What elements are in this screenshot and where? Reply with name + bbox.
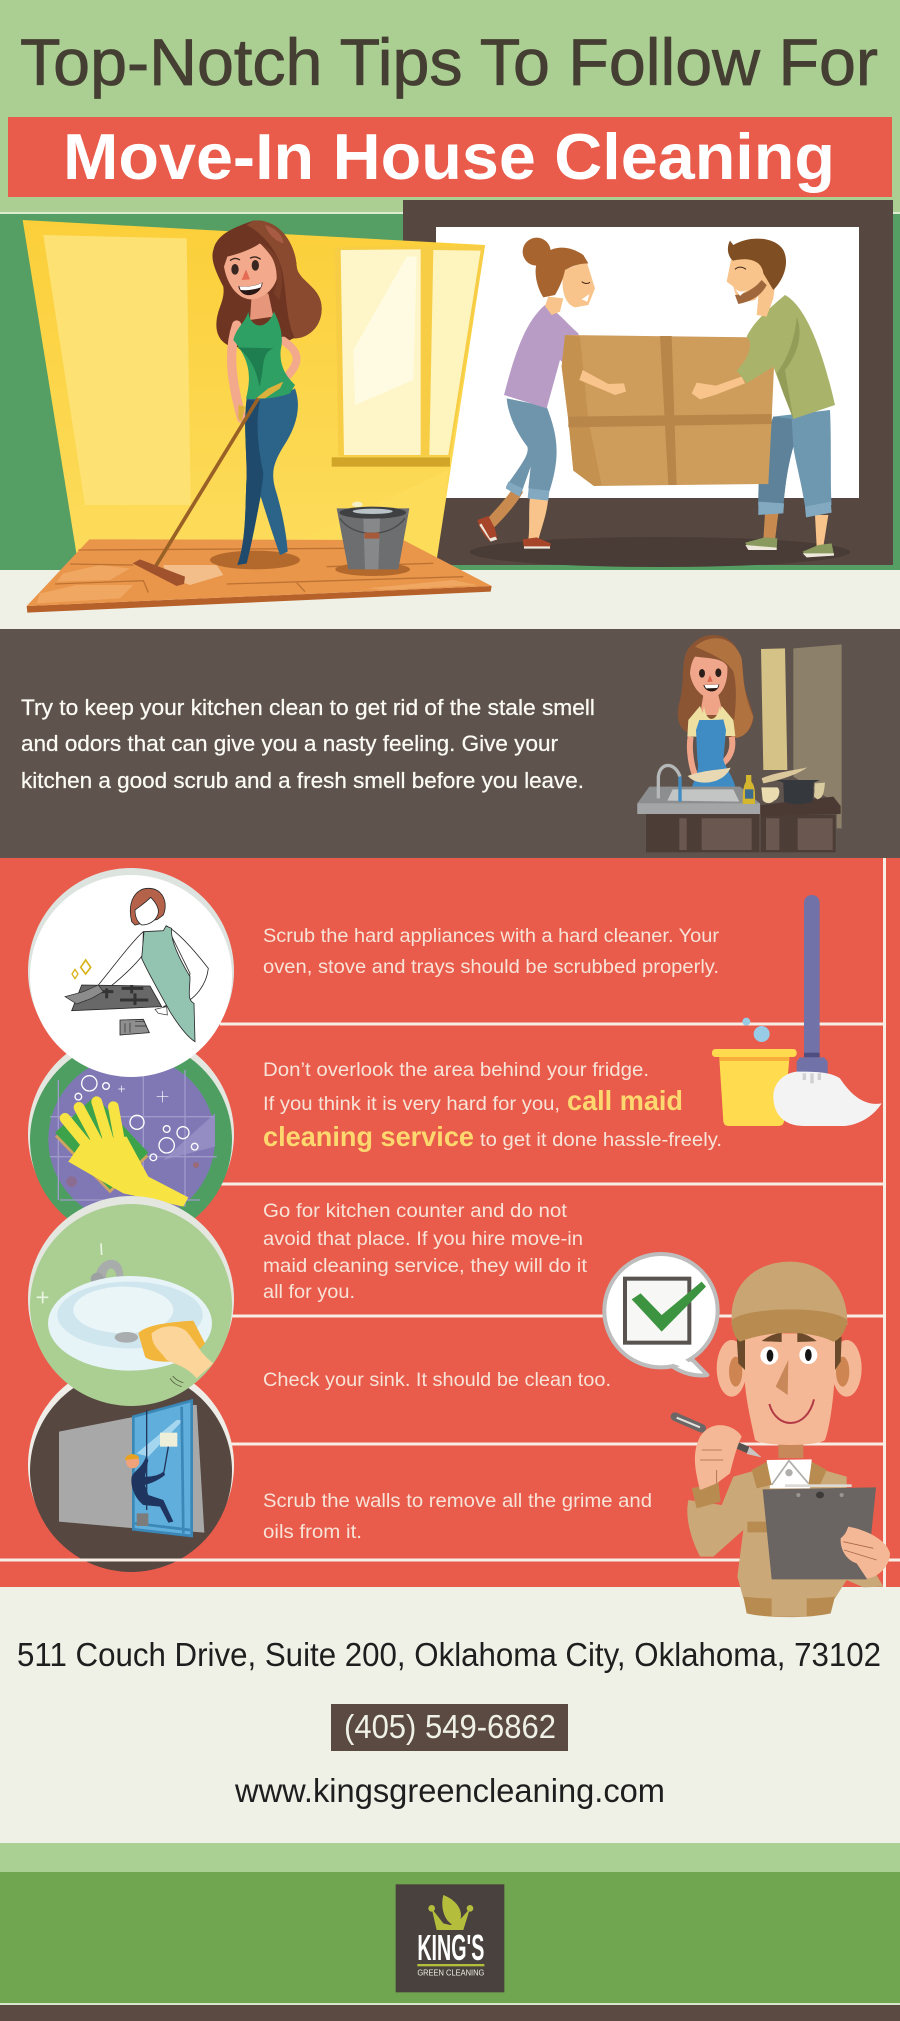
wet floor patch: [163, 565, 223, 585]
panel: moving couple: [403, 200, 893, 567]
tip 2 text: cleaning service: [263, 1121, 474, 1152]
writing hand: [695, 1425, 742, 1490]
pen: [675, 1417, 702, 1428]
tip 3 text: [263, 1201, 588, 1303]
illustration: couple carrying box: [477, 238, 835, 557]
cabinets: [646, 814, 759, 852]
hair back: [212, 220, 322, 347]
icon circle: fourth tip walls: [28, 1362, 234, 1572]
tip 1 text: [263, 926, 720, 978]
logo: King's Green Cleaning: GREEN CLEANING: [417, 1969, 484, 1978]
tip 2 text: to get it done hassle-freely.: [480, 1130, 722, 1151]
logo: King's Green Cleaning: [396, 1884, 504, 1992]
face: [740, 1333, 839, 1445]
panel: tips: [0, 858, 900, 1587]
footer phone: (405) 549-6862: [344, 1708, 556, 1745]
bottle: [743, 775, 755, 804]
man legs: [763, 513, 778, 540]
box: [562, 335, 774, 486]
icon circle: first tip appliances: [28, 868, 234, 1077]
intro text: kitchen a good scrub and a fresh smell before you leave.: [21, 768, 584, 793]
hair: [678, 635, 753, 738]
illustration: woman washing dishes: [637, 635, 842, 852]
man shirt: [737, 295, 835, 419]
doorway: [761, 648, 787, 770]
hair: [130, 888, 165, 925]
arms: [690, 737, 695, 775]
arms: [579, 370, 626, 395]
clipboard: [763, 1487, 876, 1579]
icon circle: third tip sink: [28, 1196, 234, 1406]
shirt collar: [767, 1459, 812, 1488]
icon circle: second tip fridge: [28, 1031, 234, 1241]
neck: [778, 1444, 803, 1458]
footer website: www.kingsgreencleaning.com: [234, 1772, 665, 1809]
window panes: [341, 249, 421, 455]
neck and arms: [250, 293, 273, 320]
woman head: [545, 297, 563, 315]
tip 2 text: Don’t overlook the area behind your fridge.: [263, 1060, 649, 1081]
tip 2 text: [263, 1060, 722, 1152]
ears: [717, 1340, 747, 1397]
crown icon: [428, 1895, 473, 1930]
stove: [72, 985, 162, 1011]
tip 3 text: maid cleaning service, they will do it: [263, 1256, 588, 1277]
intro text: and odors that can give you a nasty feeling. Give your: [21, 731, 558, 756]
woman legs: [485, 490, 523, 528]
title: Top-Notch Tips To Follow For: [20, 25, 878, 99]
intro text: [21, 695, 595, 793]
icon: mop and bucket: [712, 895, 882, 1126]
apron and shirt: [98, 932, 143, 992]
cloth: [120, 1019, 149, 1035]
jacket: [687, 1470, 883, 1601]
tip 5 text: [263, 1491, 652, 1543]
plate: [688, 768, 731, 783]
face: [224, 243, 277, 299]
tip 4 text: Check your sink. It should be clean too.: [263, 1370, 611, 1391]
panel: kitchen intro: [0, 629, 900, 858]
cap: [732, 1262, 847, 1325]
tip 5 text: oils from it.: [263, 1522, 362, 1543]
mop: [155, 398, 258, 567]
pot and dishes: [776, 780, 820, 804]
footer bands: [0, 1843, 900, 2021]
apron: [692, 719, 736, 788]
face: [690, 657, 727, 698]
header band: [0, 0, 900, 570]
tip 2 text: call maid: [567, 1085, 683, 1116]
green top: [233, 312, 295, 399]
jeans: [237, 388, 298, 565]
woman sweater: [504, 305, 588, 408]
tip 3 text: all for you.: [263, 1282, 355, 1303]
hand and glove: [256, 382, 283, 398]
holding hand: [841, 1527, 890, 1578]
tip 1 text: Scrub the hard appliances with a hard cleaner. Your: [263, 926, 720, 947]
tip 3 text: Go for kitchen counter and do not: [263, 1201, 568, 1222]
intro text: Try to keep your kitchen clean to get rid of the stale smell: [21, 695, 595, 720]
yellow wall: [23, 220, 485, 560]
cap brim: [732, 1309, 847, 1342]
speech bubble: [604, 1254, 718, 1375]
neck and shoulders: [700, 695, 723, 715]
logo: King's Green Cleaning: KING'S: [417, 1927, 484, 1968]
tip 3 text: avoid that place. If you hire move-in: [263, 1229, 583, 1250]
title banner: Move-In House Cleaning: [63, 120, 835, 193]
bucket: [337, 508, 409, 569]
tip 1 text: oven, stove and trays should be scrubbed properly.: [263, 957, 719, 978]
floor: [27, 586, 492, 613]
tip 5 text: Scrub the walls to remove all the grime and: [263, 1491, 652, 1512]
sparkle: [81, 960, 91, 974]
sink counter: [637, 787, 760, 814]
floor shadows: [210, 551, 300, 569]
tip 2 text: If you think it is very hard for you,: [263, 1094, 560, 1115]
illustration: woman mopping room: [23, 220, 492, 613]
illustration: inspector with clipboard: [604, 1254, 890, 1617]
man head: [757, 277, 776, 317]
